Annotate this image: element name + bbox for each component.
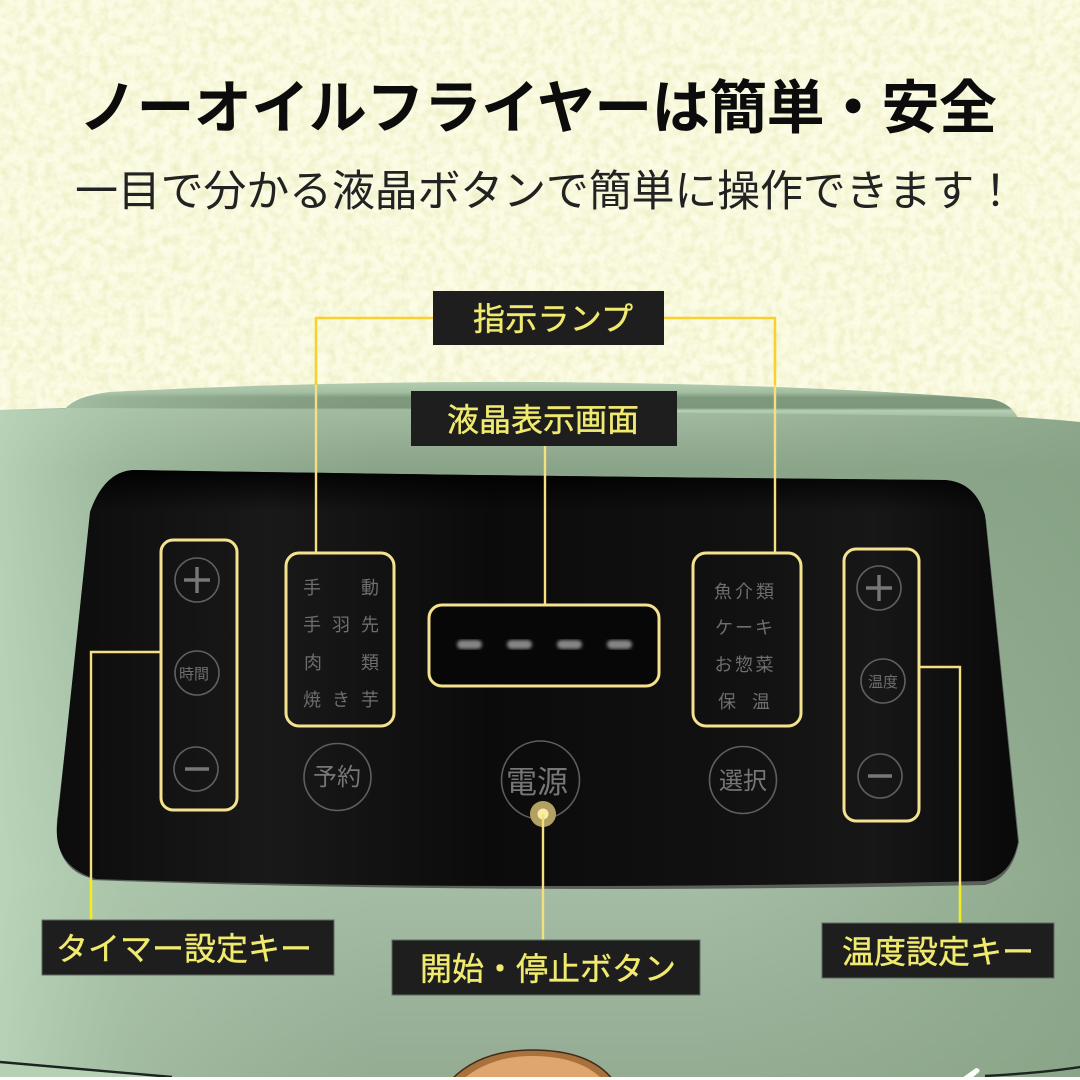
power dot [530,801,556,827]
menu list left: 動 [361,578,379,598]
temperature button: 温度 [868,674,898,691]
callout: 液晶表示画面: 液晶表示画面 [447,402,639,438]
start/stop callout [392,801,700,995]
temperature key callout [822,667,1054,978]
icon: minus button [858,754,902,798]
label box: indicator lamps [433,291,664,345]
menu list left: 芋 [361,690,379,710]
menu list left: 先 [361,615,379,635]
start/stop callout: 開始・停止ボタン [420,951,676,987]
menu list left [286,553,394,726]
menu list right: 魚介類 [714,582,774,602]
select button [710,746,776,814]
menu list right [693,553,801,726]
menu list right: ケーキ [715,618,773,638]
power button [502,741,580,819]
fryer lid [65,382,1018,430]
timer key group [161,540,237,810]
timer button [175,651,219,695]
temperature button [861,659,905,703]
reserve button: 予約 [313,764,361,791]
callout: 液晶表示画面 [411,391,677,605]
menu list left: き [332,690,350,710]
leader lines: indicator lamps [316,318,775,385]
menu list right: 温 [752,692,770,712]
select button: 選択 [719,768,767,795]
black control panel [57,470,1019,889]
icon: minus button [174,747,218,791]
callout: 指示ランプ [316,291,775,553]
menu list left: 肉 [304,653,322,673]
temperature key group [844,549,919,821]
menu list left: 手 [303,578,321,598]
menu list left: 焼 [303,690,321,710]
menu list left: 類 [361,653,379,673]
timer key callout [42,652,334,975]
icon: plus button [857,566,901,610]
timer button: 時間 [179,666,209,683]
orange handle [451,1050,613,1080]
reserve button [304,744,371,810]
white mark [962,1068,980,1078]
power button: 電源 [506,765,568,800]
menu list right: 保 [718,692,736,712]
fryer bottom seam [0,1062,1080,1077]
fryer side shading [0,383,1080,1080]
fryer front [0,408,1080,1080]
menu list left: 羽 [332,615,350,635]
LCD display [429,605,659,686]
callout: 指示ランプ: 指示ランプ [473,301,633,337]
white bottom strip [0,1077,1080,1080]
icon: plus button [175,558,219,602]
subtitle: 一目で分かる液晶ボタンで簡単に操作できます！ [75,168,1017,216]
background: cream paper [0,0,1080,430]
temperature key callout: 温度設定キー [842,934,1034,970]
title: ノーオイルフライヤーは簡単・安全 [79,76,997,141]
menu list left: 手 [303,615,321,635]
timer key callout: タイマー設定キー [56,931,312,967]
menu list right: お惣菜 [714,655,774,675]
air fryer body [0,382,1080,1080]
